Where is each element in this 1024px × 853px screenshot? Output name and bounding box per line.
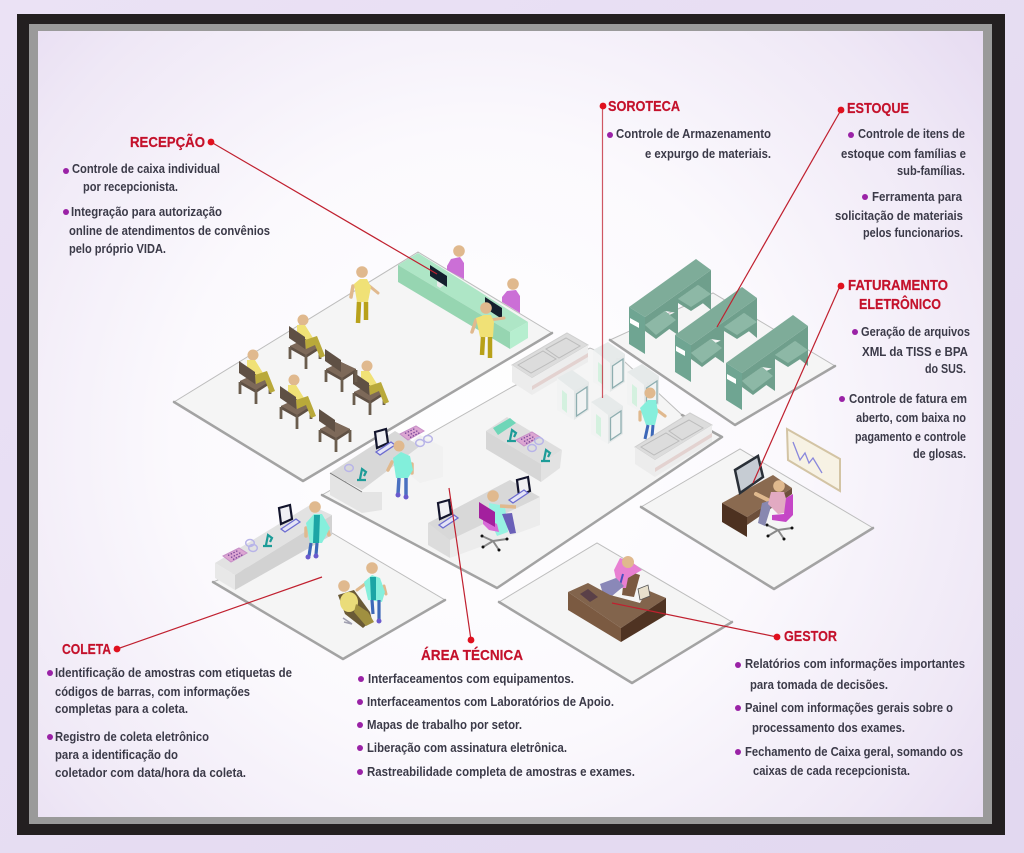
text block: estoque: Controle de itens de bbox=[858, 127, 965, 141]
text block: faturamento eletrônico: Geração de arquivos bbox=[861, 325, 970, 339]
person standing in waiting area bbox=[351, 266, 378, 323]
heading: faturamento eletrônico: ELETRÔNICO bbox=[859, 295, 941, 313]
heading: recepção: RECEPÇÃO bbox=[130, 133, 205, 151]
leader line: gestor bbox=[612, 603, 777, 637]
waiting chairs with seated patients bbox=[239, 314, 389, 452]
text block: estoque: sub-famílias. bbox=[897, 164, 965, 178]
text block: gestor: Painel com informações gerais sobre o bbox=[745, 701, 953, 715]
billing monitor bbox=[735, 456, 763, 493]
person beside refrigerators bbox=[640, 388, 665, 439]
text block: coleta: coletador com data/hora da coleta. bbox=[55, 766, 246, 780]
reception monitor 1 bbox=[430, 265, 447, 288]
heading: gestor: GESTOR bbox=[784, 628, 837, 645]
text block: recepção: Controle de caixa individual bbox=[72, 162, 220, 176]
text block: coleta: Registro de coleta eletrônico bbox=[55, 730, 209, 744]
person at reception counter bbox=[472, 302, 504, 358]
leader line: soroteca bbox=[602, 106, 604, 398]
lab bench with seated technician bbox=[428, 477, 540, 558]
text block: coleta bbox=[47, 666, 292, 780]
floor: coleta bbox=[213, 533, 445, 659]
floor: recepção bbox=[174, 252, 552, 481]
text block: coleta: Identificação de amostras com etiquetas de bbox=[55, 666, 292, 680]
text block: gestor: processamento dos exames. bbox=[752, 721, 905, 735]
text block: recepção bbox=[63, 162, 270, 256]
sample freezer left bbox=[512, 333, 588, 395]
sample refrigerators bbox=[557, 342, 659, 444]
floor: faturamento bbox=[641, 449, 873, 589]
text block: faturamento eletrônico: aberto, com baixa no bbox=[856, 411, 966, 425]
leader line: estoque bbox=[717, 110, 841, 327]
heading: soroteca: SOROTECA bbox=[608, 98, 680, 115]
heading: faturamento eletrônico: FATURAMENTO bbox=[848, 277, 948, 294]
text block: coleta: códigos de barras, com informações bbox=[55, 685, 250, 699]
leader line: faturamento bbox=[753, 286, 840, 483]
manager person seated bbox=[600, 556, 642, 597]
text block: estoque: pelos funcionarios. bbox=[863, 226, 963, 240]
lab bench top centre bbox=[486, 417, 562, 482]
reception staff: purple woman 2 bbox=[502, 278, 520, 313]
text block: área técnica: Liberação com assinatura eletrônica. bbox=[367, 741, 567, 755]
text block: faturamento eletrônico: do SUS. bbox=[925, 362, 966, 376]
text block: área técnica: Interfaceamentos com Laboratórios de Apoio. bbox=[367, 695, 614, 709]
text block: faturamento eletrônico: Controle de fatura em bbox=[849, 392, 967, 406]
text block: recepção: pelo próprio VIDA. bbox=[69, 242, 166, 256]
billing desk bbox=[722, 475, 792, 537]
text block: gestor: Relatórios com informações importantes bbox=[745, 657, 965, 671]
heading: estoque: ESTOQUE bbox=[847, 100, 909, 117]
leader line: coleta bbox=[117, 577, 322, 649]
text block: gestor bbox=[735, 657, 965, 778]
text block: faturamento eletrônico: de glosas. bbox=[913, 447, 966, 461]
text block: coleta: completas para a coleta. bbox=[55, 702, 188, 716]
heading: coleta: COLETA bbox=[62, 641, 111, 658]
text block: recepção: Integração para autorização bbox=[71, 205, 222, 219]
text block: recepção: online de atendimentos de convênios bbox=[69, 224, 270, 238]
coleta bench with technician bbox=[215, 501, 332, 590]
heading: faturamento eletrônico bbox=[838, 277, 948, 313]
text block: estoque: solicitação de materiais bbox=[835, 209, 963, 223]
text block: estoque bbox=[835, 127, 966, 240]
text block: soroteca bbox=[607, 127, 771, 161]
stock shelves bbox=[629, 259, 808, 410]
text block: área técnica: Mapas de trabalho por setor. bbox=[367, 718, 522, 732]
patient in collection chair bbox=[338, 580, 374, 628]
sample freezer right bbox=[635, 413, 712, 477]
heading: área técnica: ÁREA TÉCNICA bbox=[421, 647, 523, 664]
text block: gestor: para tomada de decisões. bbox=[750, 678, 888, 692]
text block: soroteca: e expurgo de materiais. bbox=[645, 147, 771, 161]
heading: área técnica bbox=[421, 637, 523, 664]
text block: gestor: caixas de cada recepcionista. bbox=[753, 764, 910, 778]
text block: área técnica: Interfaceamentos com equipamentos. bbox=[368, 672, 574, 686]
text block: estoque: Ferramenta para bbox=[872, 190, 963, 204]
manager desk bbox=[568, 583, 666, 642]
text block: coleta: para a identificação do bbox=[55, 748, 178, 762]
text block: recepção: por recepcionista. bbox=[83, 180, 178, 194]
text block: faturamento eletrônico bbox=[839, 325, 970, 461]
reception counter bbox=[398, 253, 528, 349]
billing clerk seated bbox=[756, 480, 794, 540]
leader line: recepção bbox=[211, 142, 437, 274]
text block: faturamento eletrônico: pagamento e controle bbox=[855, 430, 966, 444]
chart board on wall bbox=[787, 429, 840, 491]
text block: estoque: estoque com famílias e bbox=[841, 147, 966, 161]
text block: soroteca: Controle de Armazenamento bbox=[616, 127, 771, 141]
text block: gestor: Fechamento de Caixa geral, somando os bbox=[745, 745, 963, 759]
floor: área técnica e soroteca bbox=[322, 348, 722, 588]
reception monitor 2 bbox=[485, 297, 502, 319]
text block: faturamento eletrônico: XML da TISS e BPA bbox=[862, 345, 968, 359]
text block: área técnica bbox=[357, 672, 635, 779]
floor: gestor bbox=[499, 543, 732, 683]
reception staff: purple woman 1 bbox=[447, 245, 465, 279]
lab bench left with technician bbox=[330, 426, 443, 513]
text block: área técnica: Rastreabilidade completa de amostras e exames. bbox=[367, 765, 635, 779]
nurse beside collection chair bbox=[357, 562, 386, 624]
leader line: área técnica bbox=[449, 488, 471, 640]
floor: estoque bbox=[610, 293, 835, 425]
